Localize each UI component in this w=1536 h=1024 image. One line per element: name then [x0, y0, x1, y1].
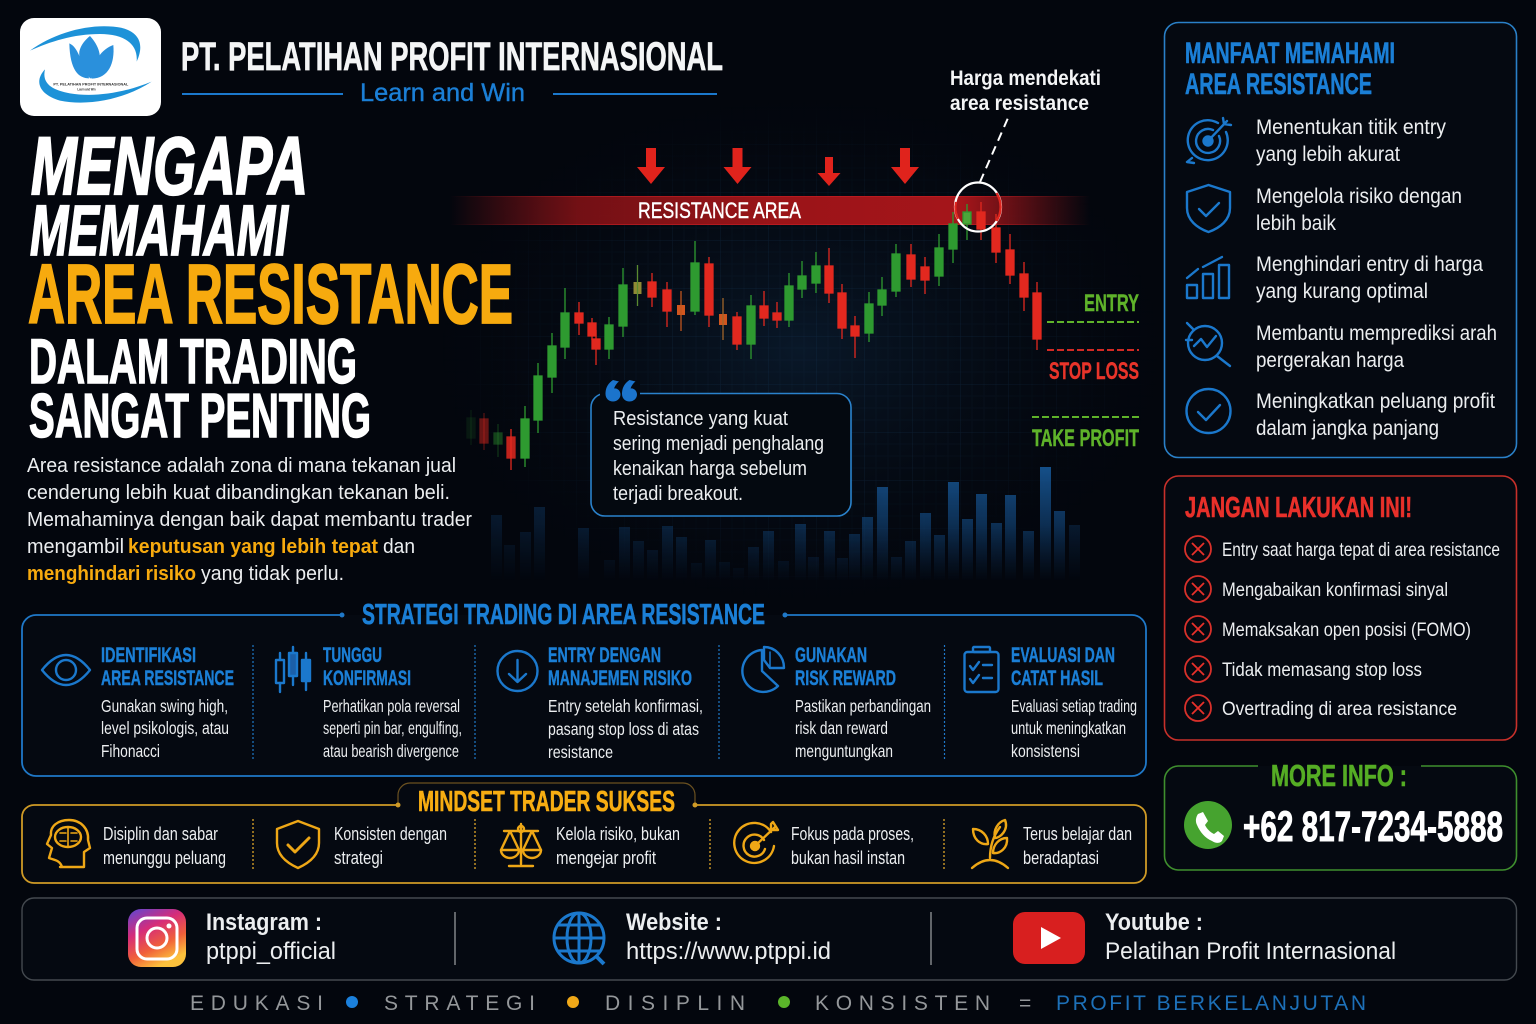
icon: instagram	[128, 909, 186, 967]
red down arrows	[637, 148, 919, 186]
mindset 3 text: Kelola risiko, bukan	[556, 824, 680, 844]
annotation: harga mendekati	[950, 67, 1101, 115]
footer tagline: DISIPLIN	[605, 992, 745, 1015]
youtube text: Pelatihan Profit Internasional	[1105, 938, 1396, 965]
icon: eye	[42, 655, 90, 685]
intro paragraph: menghindari risiko	[27, 562, 196, 585]
panel: strategi trading	[22, 599, 1146, 776]
icon: growth bars	[1187, 257, 1229, 298]
highlight circle with leader	[955, 118, 1008, 232]
icon: plant	[972, 820, 1008, 868]
website text	[626, 909, 831, 965]
intro paragraph: keputusan yang lebih tepat	[128, 535, 378, 558]
quote callout: Resistance yang kuat	[613, 408, 788, 430]
benefit 5	[1256, 390, 1495, 440]
icon: shield check	[277, 821, 319, 868]
more info heading: MORE INFO :	[1271, 758, 1407, 793]
quote callout: sering menjadi penghalang	[613, 433, 824, 455]
manfaat heading: AREA RESISTANCE	[1185, 68, 1372, 101]
instagram text: ptppi_official	[206, 938, 336, 965]
step 5 text: untuk meningkatkan	[1011, 718, 1126, 738]
benefit 5: Meningkatkan peluang profit	[1256, 390, 1495, 413]
item 3	[1185, 616, 1471, 642]
intro paragraph: cenderung lebih kuat dibandingkan tekanan beli.	[27, 481, 450, 504]
mindset heading: MINDSET TRADER SUKSES	[418, 786, 675, 818]
step 3 text: ENTRY DENGAN	[548, 643, 661, 667]
footer tagline: EDUKASI	[190, 992, 323, 1015]
item 5: Overtrading di area resistance	[1222, 698, 1457, 720]
main title	[28, 121, 513, 451]
tagline: Learn and Win	[360, 79, 525, 107]
icon: brain head	[47, 820, 90, 867]
step 5 text	[1011, 643, 1137, 761]
step 5 text: konsistensi	[1011, 741, 1080, 761]
mindset 5 text	[1023, 824, 1132, 868]
panel: mindset trader	[22, 783, 1146, 883]
step 1 text: Gunakan swing high,	[101, 696, 228, 716]
benefit 1: Menentukan titik entry	[1256, 116, 1446, 139]
icon: magnifier chart	[1186, 323, 1230, 366]
icon: arrow down circle	[498, 651, 538, 691]
benefit 2: Mengelola risiko dengan	[1256, 185, 1462, 208]
benefit 1: yang lebih akurat	[1256, 143, 1400, 166]
benefit 3	[1256, 253, 1483, 303]
step 4 text: RISK REWARD	[795, 666, 896, 690]
quote callout: kenaikan harga sebelum	[613, 458, 807, 480]
step 4 text: menguntungkan	[795, 741, 893, 761]
step 1 text: AREA RESISTANCE	[101, 666, 234, 690]
main title: AREA RESISTANCE	[28, 247, 513, 341]
step 1 text	[101, 643, 234, 761]
mindset 4 text	[791, 824, 914, 868]
panel: manfaat	[1164, 22, 1516, 458]
stop loss marker: STOP LOSS	[1049, 358, 1139, 385]
footer tagline: =	[1019, 992, 1031, 1015]
benefit 5: dalam jangka panjang	[1256, 417, 1439, 440]
stop loss marker	[1047, 350, 1139, 385]
icon: check circle	[1186, 389, 1230, 433]
strategi heading: STRATEGI TRADING DI AREA RESISTANCE	[362, 599, 765, 631]
youtube text	[1105, 909, 1396, 965]
panel: jangan lakukan	[1164, 476, 1516, 740]
benefit 2	[1256, 185, 1462, 235]
website text: Website :	[626, 909, 722, 936]
intro paragraph	[27, 454, 472, 585]
item 5	[1185, 695, 1457, 721]
panel: more info	[1164, 758, 1516, 870]
website text: https://www.ptppi.id	[626, 938, 831, 965]
instagram text	[206, 909, 336, 965]
step 1 text: level psikologis, atau	[101, 718, 229, 738]
mindset 2 text	[334, 824, 447, 868]
step 2 text	[323, 643, 462, 761]
quote callout	[591, 380, 851, 516]
item 2: Mengabaikan konfirmasi sinyal	[1222, 579, 1448, 601]
annotation: harga mendekati: area resistance	[950, 92, 1089, 115]
item 2	[1185, 576, 1448, 602]
benefit 3: Menghindari entry di harga	[1256, 253, 1483, 276]
mindset 4 text: Fokus pada proses,	[791, 824, 914, 844]
take profit marker	[1032, 417, 1139, 452]
warning heading: JANGAN LAKUKAN INI!	[1185, 492, 1412, 524]
resistance band	[450, 196, 1090, 225]
company logo	[20, 18, 161, 116]
manfaat heading: MANFAAT MEMAHAMI	[1185, 37, 1395, 70]
icon: phone	[1184, 801, 1232, 849]
benefit 4	[1256, 322, 1497, 372]
instagram text: Instagram :	[206, 909, 322, 936]
step 4 text	[795, 643, 931, 761]
step 2 text: TUNGGU	[323, 643, 382, 667]
icon: shield	[1187, 185, 1230, 232]
icon: balance scale	[501, 824, 541, 866]
benefit 3: yang kurang optimal	[1256, 280, 1428, 303]
annotation: harga mendekati: Harga mendekati	[950, 67, 1101, 90]
step 2 text: KONFIRMASI	[323, 666, 411, 690]
icon: target	[734, 822, 778, 863]
step 1 text: IDENTIFIKASI	[101, 643, 196, 667]
benefit 4: pergerakan harga	[1256, 349, 1404, 372]
mindset 1 text: Disiplin dan sabar	[103, 824, 218, 844]
main title: SANGAT PENTING	[29, 382, 371, 451]
step 3 text: resistance	[548, 742, 613, 762]
mindset 2 text: Konsisten dengan	[334, 824, 447, 844]
mindset 3 text	[556, 824, 680, 868]
mindset 1 text	[103, 824, 226, 868]
intro paragraph: mengambil	[27, 535, 124, 558]
main title: MEMAHAMI	[30, 192, 289, 271]
entry marker	[1047, 290, 1139, 322]
candlestick chart	[467, 202, 1041, 470]
footer tagline: STRATEGI	[384, 992, 535, 1015]
step 5 text: Evaluasi setiap trading	[1011, 696, 1137, 716]
item 4: Tidak memasang stop loss	[1222, 659, 1422, 681]
icon: target	[1187, 118, 1231, 163]
company logo: Learn and Win	[77, 88, 96, 92]
youtube text: Youtube :	[1105, 909, 1203, 936]
step 5 text: CATAT HASIL	[1011, 666, 1103, 690]
mindset 3 text: mengejar profit	[556, 848, 656, 868]
footer tagline: PROFIT BERKELANJUTAN	[1056, 992, 1366, 1015]
step 4 text: Pastikan perbandingan	[795, 696, 931, 716]
item 3: Memaksakan open posisi (FOMO)	[1222, 619, 1471, 641]
step 2 text: atau bearish divergence	[323, 741, 459, 761]
icon: clipboard checklist	[964, 647, 998, 692]
step 3 text: MANAJEMEN RISIKO	[548, 666, 692, 690]
step 3 text: Entry setelah konfirmasi,	[548, 696, 703, 716]
resistance band: RESISTANCE AREA	[638, 198, 801, 223]
benefit 4: Membantu memprediksi arah	[1256, 322, 1497, 345]
step 3 text: pasang stop loss di atas	[548, 719, 699, 739]
intro paragraph: dan	[383, 535, 415, 558]
step 5 text: EVALUASI DAN	[1011, 643, 1115, 667]
icon: globe	[554, 913, 604, 964]
take profit marker: TAKE PROFIT	[1032, 425, 1139, 452]
main title: DALAM TRADING	[29, 327, 357, 397]
benefit 1	[1256, 116, 1446, 166]
step 1 text: Fihonacci	[101, 741, 160, 761]
benefit 2: lebih baik	[1256, 212, 1336, 235]
icon: candlesticks	[276, 647, 310, 692]
step 3 text	[548, 643, 703, 762]
icon: youtube	[1013, 912, 1085, 964]
mindset 5 text: beradaptasi	[1023, 848, 1099, 868]
volume bars	[491, 467, 1080, 580]
panel: social links	[22, 898, 1516, 980]
entry marker: ENTRY	[1084, 290, 1139, 317]
item 4	[1185, 656, 1422, 682]
step 4 text: risk dan reward	[795, 718, 888, 738]
intro paragraph: Memahaminya dengan baik dapat membantu trader	[27, 508, 472, 531]
icon: pie chart	[742, 647, 784, 692]
mindset 2 text: strategi	[334, 848, 383, 868]
intro paragraph: Area resistance adalah zona di mana tekanan jual	[27, 454, 456, 477]
step 4 text: GUNAKAN	[795, 643, 867, 667]
intro paragraph: yang tidak perlu.	[201, 562, 344, 585]
chart background grid	[484, 132, 1116, 564]
footer tagline: KONSISTEN	[815, 992, 990, 1015]
item 1	[1185, 536, 1500, 562]
footer tagline	[190, 992, 1366, 1015]
mindset 4 text: bukan hasil instan	[791, 848, 905, 868]
main title: MENGAPA	[31, 121, 308, 212]
company logo: PT. PELATIHAN PROFIT INTERNASIONAL	[53, 82, 129, 86]
quote callout: terjadi breakout.	[613, 483, 743, 505]
step 2 text: Perhatikan pola reversal	[323, 696, 460, 716]
mindset 5 text: Terus belajar dan	[1023, 824, 1132, 844]
mindset 1 text: menunggu peluang	[103, 848, 226, 868]
manfaat heading	[1185, 37, 1395, 101]
step 2 text: seperti pin bar, engulfing,	[323, 718, 462, 738]
company name: PT. PELATIHAN PROFIT INTERNASIONAL	[181, 35, 723, 79]
